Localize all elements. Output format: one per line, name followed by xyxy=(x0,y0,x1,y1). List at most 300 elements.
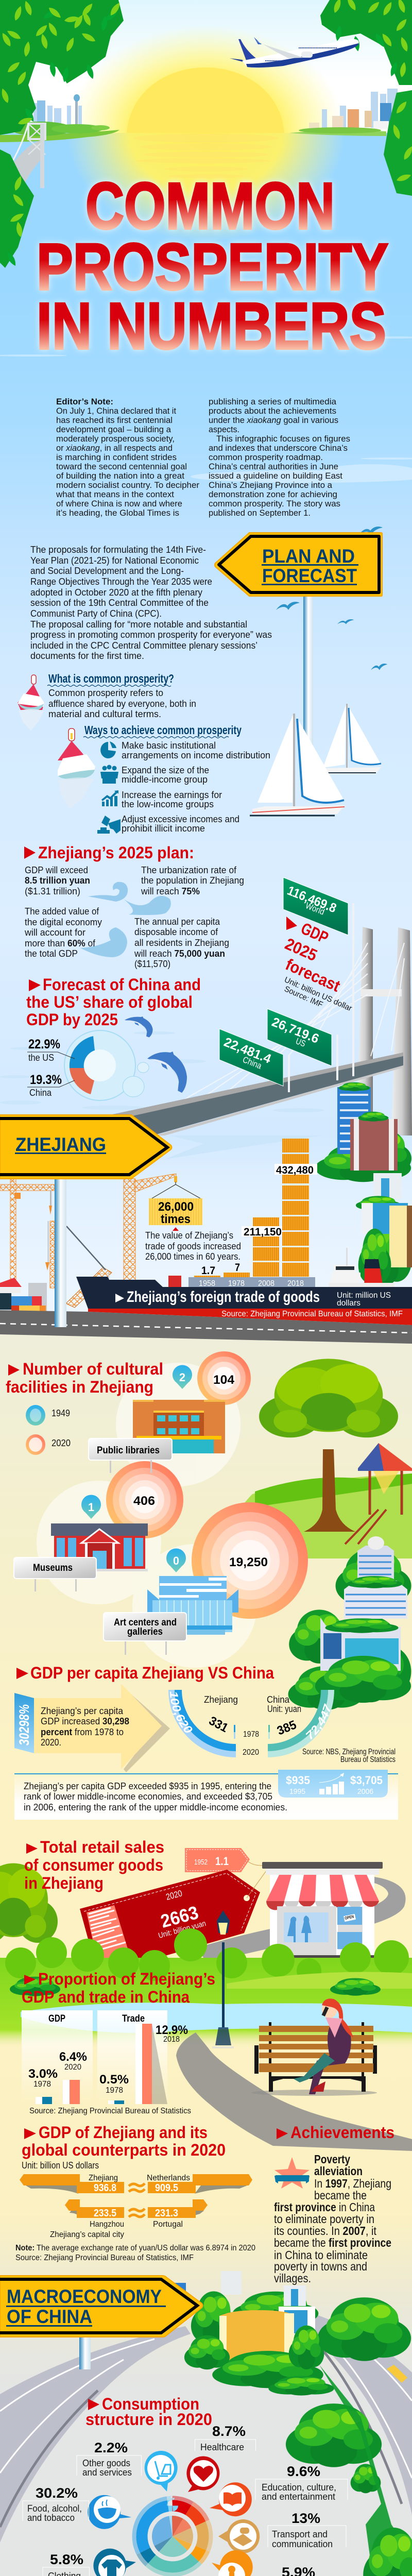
plan 2025 facts xyxy=(24,865,244,969)
consumption labels: 13% xyxy=(291,2511,320,2526)
consumption labels: and entertainment xyxy=(262,2492,335,2502)
left city island xyxy=(0,94,119,142)
editor's note: of where China is now and where xyxy=(56,499,182,509)
park: tree, hill and playground xyxy=(216,1359,412,1558)
sign: public libraries xyxy=(89,1438,172,1473)
editor's note: under the xiaokang goal in various xyxy=(209,416,338,425)
half-ring chart: Zhejiang vs China: 72,447 xyxy=(306,1703,331,1739)
half-ring chart: Zhejiang vs China: 331 xyxy=(207,1714,230,1735)
price tag 1952: 1952 xyxy=(194,1858,208,1867)
city trees and buildings xyxy=(168,2271,412,2576)
heading: GDP of Zhejiang and counterparts xyxy=(22,2123,226,2171)
achievements: became the xyxy=(314,2189,367,2202)
ways to achieve: middle-income group xyxy=(122,774,208,785)
price tag 2020 xyxy=(80,1865,270,1965)
ways to achieve xyxy=(83,723,270,834)
foreign trade of goods ship xyxy=(76,1139,412,1325)
bar panels: GDP and trade shares: 12.9% xyxy=(156,2023,188,2037)
plan paragraph: included in the CPC Central Committee plenary sessions’ xyxy=(30,640,258,651)
shop: OPEN xyxy=(345,1914,354,1921)
bubble donut chart: 19.3% xyxy=(30,1073,62,1087)
ways to achieve: Ways to achieve common prosperity xyxy=(84,723,242,737)
sign: museums: Museums xyxy=(33,1563,73,1573)
editor's note: Editor’s Note: xyxy=(56,397,113,406)
ribbons comparison: Netherlands xyxy=(147,2174,190,2182)
art centers: 1949 pin xyxy=(166,1549,186,1572)
achievements: its counties. In 2007, it xyxy=(274,2224,377,2238)
libraries: 1949 pin xyxy=(173,1365,192,1389)
heading: total retail sales: in Zhejiang xyxy=(24,1874,104,1892)
trade growth note: The value of Zhejiang’s xyxy=(145,1230,233,1241)
lawn and bushes xyxy=(0,1928,412,2048)
signpost pole: macroeconomy xyxy=(79,2337,91,2369)
museum building xyxy=(51,1523,148,1571)
bridge towers xyxy=(357,927,373,1116)
sign: China GDP: China xyxy=(242,1055,263,1071)
editor's note: aspects. xyxy=(209,425,239,434)
dolphins xyxy=(125,1016,187,1093)
income badge xyxy=(278,1770,388,1798)
museums: 1949 pin xyxy=(81,1495,101,1519)
ways to achieve: Increase the earnings for xyxy=(122,790,222,800)
callout arrow: 2020. xyxy=(41,1737,61,1748)
achievements: to eliminate poverty in xyxy=(274,2212,374,2226)
ribbons comparison: 233.5 xyxy=(94,2208,116,2219)
achievements: alleviation xyxy=(314,2164,363,2178)
bubble donut chart: China xyxy=(29,1088,52,1098)
heading: number of cultural facilities: Number of cultural xyxy=(23,1360,163,1378)
income badge: $935 xyxy=(286,1774,310,1787)
bubble donut chart xyxy=(27,1030,149,1100)
heading: Zhejiang's 2025 plan: Zhejiang’s 2025 plan: xyxy=(38,843,194,862)
trade bars xyxy=(108,2024,167,2104)
heading: number of cultural facilities xyxy=(6,1360,163,1396)
consumption labels: 9.6% xyxy=(287,2464,320,2479)
foliage: top left xyxy=(0,0,124,268)
sign: Zhejiang: ZHEJIANG xyxy=(15,1134,106,1155)
foreign trade of goods ship: Unit: million US xyxy=(337,1291,391,1300)
plan 2025 facts: all residents in Zhejiang xyxy=(134,938,229,948)
ways to achieve: the low-income groups xyxy=(122,799,214,809)
consumption labels: Other goods xyxy=(82,2458,130,2468)
foreign trade of goods ship: 2008 xyxy=(258,1279,274,1288)
China share xyxy=(70,1068,94,1094)
heading: GDP 2025 forecast: GDP xyxy=(298,919,331,947)
editor's note: China’s central authorities in June xyxy=(209,462,338,471)
editor's note: is marching in confident strides xyxy=(56,453,177,462)
foreign trade of goods ship: 7 xyxy=(235,1262,240,1274)
half-ring chart: Zhejiang vs China xyxy=(168,1690,396,1764)
plan 2025 facts: The added value of xyxy=(25,906,99,917)
sign: US GDP: US xyxy=(295,1036,307,1049)
sign: public libraries: Public libraries xyxy=(97,1445,160,1456)
editor's note: products about the achievements xyxy=(209,406,336,416)
editor's note: toward the second centennial goal xyxy=(56,462,187,471)
dockside containers and warehouse xyxy=(0,1278,47,1315)
heading: GDP of Zhejiang and counterparts: Unit: billion US dollars xyxy=(22,2160,99,2171)
heading: GDP per capita Zhejiang VS China: GDP per capita Zhejiang VS China xyxy=(30,1664,274,1682)
art centers: 19,250 circle xyxy=(192,1502,308,1619)
sign: Zhejiang xyxy=(0,1115,172,1179)
hanging container: 26,000 times: times xyxy=(161,1212,191,1226)
achievements xyxy=(274,2123,394,2285)
what is common prosperity: Common prosperity refers to xyxy=(48,688,163,698)
water ripples xyxy=(0,1031,324,1159)
bar panels: GDP and trade shares: Source: Zhejiang Provincial Bureau of Statistics xyxy=(29,2107,191,2115)
heading: GDP 2025 forecast: Source: IMF xyxy=(283,985,324,1009)
heading: GDP of Zhejiang and counterparts: global counterparts in 2020 xyxy=(22,2141,226,2159)
value labels xyxy=(274,1164,317,1175)
half-ring chart: Zhejiang vs China: 100,620 xyxy=(170,1691,193,1733)
plan paragraph: and Social Development and the Long- xyxy=(30,566,184,576)
trade growth note xyxy=(145,1227,241,1262)
callout arrow xyxy=(14,1684,170,1772)
signpost pole: plan and forecast xyxy=(303,596,313,745)
sailboat small xyxy=(323,704,381,774)
plan paragraph: Year Plan (2021-25) for National Economic xyxy=(30,555,199,566)
consumption labels: 30.2% xyxy=(36,2485,78,2501)
art center building xyxy=(147,1576,238,1635)
heading: GDP 2025 forecast: Unit: billion US dollar xyxy=(283,975,353,1013)
editor's note: common prosperity roadmap. xyxy=(209,453,323,462)
hull red stripe xyxy=(88,1309,412,1325)
consumption labels: and tobacco xyxy=(27,2513,75,2523)
heading: proportion of Zhejiang's GDP and trade xyxy=(22,1970,215,2006)
container bars xyxy=(194,1139,309,1277)
sign: art centers and galleries: galleries xyxy=(127,1626,163,1637)
plan 2025 facts: ($11,570) xyxy=(134,959,170,969)
note and source: Source: Zhejiang Provincial Bureau of Statistics, IMF xyxy=(15,2253,194,2262)
heading: total retail sales: of consumer goods xyxy=(24,1856,163,1874)
icon: food xyxy=(88,2495,131,2529)
note and source: Note: The average exchange rate of yuan/US dollar was 6.8974 in 2020 xyxy=(15,2244,255,2252)
income badge: 1995 xyxy=(289,1787,305,1796)
crane back xyxy=(0,1179,55,1288)
heading: proportion of Zhejiang's GDP and trade: GDP and trade in China xyxy=(22,1988,190,2006)
sun xyxy=(127,67,284,133)
editor's note: moderately prosperous society, xyxy=(56,434,175,444)
heading: GDP of Zhejiang and counterparts: GDP of Zhejiang and its xyxy=(39,2123,208,2142)
bar panels: GDP and trade shares: 0.5% xyxy=(99,2073,129,2087)
bridge deck xyxy=(110,1053,403,1136)
bridge cables xyxy=(170,943,404,1108)
sign: art centers and galleries: Art centers and xyxy=(114,1617,177,1628)
foreign trade of goods ship: Source: Zhejiang Provincial Bureau of Statistics, IMF xyxy=(221,1310,403,1318)
plan 2025 facts: disposable income of xyxy=(134,927,218,937)
plan 2025 facts: GDP will exceed xyxy=(25,865,88,875)
plan paragraph: adopted in October 2020 at the fifth plenary xyxy=(30,587,202,598)
callout arrow: Zhejiang’s per capita xyxy=(41,1706,124,1716)
what is common prosperity: What is common prosperity? xyxy=(48,672,174,685)
price tag 2020: 2020 xyxy=(165,1888,183,1902)
editor's note: has reached its first centennial xyxy=(56,416,173,425)
half-ring chart: Zhejiang vs China: 1978 xyxy=(243,1730,259,1739)
consumption labels: Food, alcohol, xyxy=(27,2503,82,2514)
note and source xyxy=(15,2244,255,2262)
editor's note: or xiaokang, in all respects and xyxy=(56,444,173,453)
consumption labels: communication xyxy=(272,2539,333,2549)
ways to achieve: Expand the size of the xyxy=(122,765,209,775)
editor's note: publishing a series of multimedia xyxy=(209,397,337,406)
plan 2025 facts: The annual per capita xyxy=(134,917,220,927)
plan 2025 facts: The urbanization rate of xyxy=(141,865,237,875)
plan 2025 facts: the digital economy xyxy=(25,917,102,927)
achievements: Poverty xyxy=(314,2153,350,2166)
editor's note: modern socialist country. To decipher xyxy=(56,481,200,490)
right tree top xyxy=(363,2528,412,2576)
hanging container: 26,000 times: 26,000 xyxy=(158,1200,194,1214)
sign: US GDP: 26,719.6 xyxy=(270,1015,321,1046)
heading: consumption structure: Consumption xyxy=(102,2395,199,2413)
winding road behind shop xyxy=(198,1877,406,1963)
sun glow xyxy=(67,25,345,241)
icon: pie chart xyxy=(100,741,116,758)
sign: world GDP: World xyxy=(304,901,326,917)
icon: gavel xyxy=(97,816,121,834)
achievements: first province in China xyxy=(274,2200,375,2214)
ribbons comparison: 231.3 xyxy=(155,2208,178,2219)
museums: 406 circle xyxy=(106,1460,183,1538)
buoy small xyxy=(18,675,44,731)
heading: total retail sales: Total retail sales xyxy=(40,1838,164,1856)
ribbons comparison: Hangzhou xyxy=(90,2220,124,2229)
price tag 2020: Unit: billion yuan xyxy=(158,1919,207,1940)
museums: 1949 pin: 1 xyxy=(88,1501,94,1514)
income rank panel xyxy=(14,1770,398,1820)
sailboat large xyxy=(250,714,345,816)
heading: number of cultural facilities: facilities in Zhejiang xyxy=(6,1378,153,1396)
seagulls xyxy=(276,527,387,670)
callout arrow: 30298% xyxy=(16,1704,32,1745)
street lamp xyxy=(212,1910,234,2048)
sign: macroeconomy of China xyxy=(0,2276,203,2337)
half-ring chart: Zhejiang vs China: Bureau of Statistics xyxy=(340,1755,396,1764)
sign: art centers and galleries xyxy=(104,1613,186,1655)
callout arrow: GDP increased 30,298 xyxy=(41,1716,129,1726)
bar panels: GDP and trade shares xyxy=(22,2010,191,2115)
foreign trade of goods ship: Zhejiang’s foreign trade of goods xyxy=(127,1289,320,1306)
sign: world GDP xyxy=(283,877,354,1076)
sign: world GDP: 116,469.8 xyxy=(285,884,338,916)
editor's note: what that means in the context xyxy=(56,490,174,499)
plan paragraph: Communist Party of China (CPC). xyxy=(30,608,162,619)
woman on a bench xyxy=(251,1998,377,2096)
foreign trade of goods ship: 432,480 xyxy=(276,1164,314,1176)
wispy clouds behind the editor's note xyxy=(0,336,412,483)
crane front xyxy=(124,1174,177,1287)
consumption labels: Healthcare xyxy=(200,2442,244,2452)
plan 2025 facts: more than 60% of xyxy=(25,938,96,948)
price tag 1952: 1.1 xyxy=(215,1855,229,1868)
sky xyxy=(0,0,412,133)
bubble donut chart: 22.9% xyxy=(28,1037,60,1052)
suspension bridge xyxy=(0,124,45,263)
bar panels: GDP and trade shares: GDP xyxy=(48,2013,65,2024)
legend: 1949 xyxy=(52,1408,70,1418)
achievements: became the first province xyxy=(274,2236,391,2249)
half-ring chart: Zhejiang vs China: 385 xyxy=(275,1718,298,1738)
icon: other goods xyxy=(145,2451,178,2492)
plan paragraph: Range Objectives Through the Year 2035 were xyxy=(30,577,212,587)
editor's note: common prosperity. The story was xyxy=(209,499,340,509)
hanging container: 26,000 times xyxy=(149,1177,202,1226)
trees and buildings at right of port xyxy=(315,1082,412,1285)
bar panels: GDP and trade shares: 1978 xyxy=(33,2080,51,2089)
path through park xyxy=(176,2032,412,2151)
income rank panel: rank of lower middle-income economies, and exceeded $3,705 xyxy=(24,1791,272,1802)
sun reflection xyxy=(134,133,278,178)
heading: total retail sales xyxy=(24,1838,164,1892)
category icons xyxy=(88,2451,260,2576)
main title xyxy=(37,170,388,363)
consumption labels: 2.2% xyxy=(94,2440,128,2455)
donut chart: consumption structure xyxy=(134,2498,211,2575)
icon: healthcare xyxy=(186,2456,219,2492)
half-ring chart: Zhejiang vs China: 2020 xyxy=(243,1748,259,1757)
hull xyxy=(76,1277,412,1309)
highways xyxy=(0,2314,412,2543)
trees and tower with satellite dish xyxy=(288,1536,411,1710)
editor's note xyxy=(56,397,350,518)
income rank panel: in 2006, entering the rank of the upper middle-income economies. xyxy=(24,1802,287,1812)
cable-stayed bridge xyxy=(110,927,412,1136)
heading: GDP 2025 forecast: forecast xyxy=(283,955,343,995)
sign: museums xyxy=(14,1557,96,1591)
bar panels: GDP and trade shares: 2018 xyxy=(163,2035,180,2044)
left tree xyxy=(0,1863,58,1943)
sign: China GDP: 22,481.4 xyxy=(222,1035,273,1066)
ribbons comparison xyxy=(20,2174,252,2239)
road xyxy=(0,1310,412,1344)
hero illustration: sunrise over the bay xyxy=(0,0,412,363)
plan paragraph xyxy=(30,545,272,661)
plan 2025 facts: 8.5 trillion yuan xyxy=(25,875,90,886)
ways to achieve: Adjust excessive incomes and xyxy=(122,814,239,824)
plan 2025 facts: will account for xyxy=(24,927,85,938)
plan paragraph: session of the 19th Central Committee of the xyxy=(30,598,209,608)
heading: GDP 2025 forecast: 2025 xyxy=(282,935,320,964)
chart title xyxy=(115,1294,124,1302)
icon: transport and communication xyxy=(218,2519,260,2553)
sign: macroeconomy of China: OF CHINA xyxy=(7,2306,92,2327)
bar panels: GDP and trade shares: 6.4% xyxy=(59,2050,87,2064)
ways to achieve: arrangements on income distribution xyxy=(122,750,270,760)
shop xyxy=(262,1862,383,1962)
pond xyxy=(21,2003,412,2033)
income badge: 2006 xyxy=(357,1787,373,1796)
US share xyxy=(70,1036,95,1068)
main title: COMMON xyxy=(85,170,335,243)
consumption labels: 8.7% xyxy=(212,2424,246,2439)
consumption labels: 5.8% xyxy=(50,2552,83,2567)
right city island xyxy=(289,89,405,136)
art centers: 1949 pin: 0 xyxy=(173,1554,179,1567)
legend xyxy=(26,1405,71,1455)
editor's note: it’s heading, the Global Times is xyxy=(56,509,179,518)
achievements: Achievements xyxy=(290,2123,394,2142)
foreign trade of goods ship: 211,150 xyxy=(244,1226,282,1238)
ribbons comparison: Zhejiang xyxy=(89,2174,118,2182)
sign: plan and forecast: PLAN AND xyxy=(262,546,355,567)
library building xyxy=(133,1400,225,1453)
libraries: 1949 pin: 2 xyxy=(179,1371,185,1384)
heading: forecast of China and the US share: the US’ share of global xyxy=(26,993,193,1011)
libraries: 104 circle xyxy=(197,1351,251,1405)
plan paragraph: documents for the first time. xyxy=(30,651,144,661)
foreign trade of goods ship: 2018 xyxy=(287,1279,304,1288)
consumption labels: Education, culture, xyxy=(262,2482,336,2493)
income rank panel: Zhejiang’s per capita GDP exceeded $935 in 1995, entering the xyxy=(24,1781,271,1791)
trade growth note: 26,000 times in 60 years. xyxy=(145,1251,241,1262)
trade growth note: trade of goods increased xyxy=(145,1241,241,1251)
heading: consumption structure xyxy=(85,2395,212,2429)
editor's note: On July 1, China declared that it xyxy=(56,406,176,416)
plan paragraph: The proposal calling for “more notable and substantial xyxy=(30,619,247,630)
stacked bar base xyxy=(188,1277,315,1287)
ribbons comparison: Zhejiang’s capital city xyxy=(50,2230,124,2239)
bar panels: GDP and trade shares: 2020 xyxy=(64,2063,81,2072)
price tag 2020: 2663 xyxy=(158,1902,201,1932)
plan 2025 facts: will reach 75% xyxy=(141,886,200,896)
foliage: top right xyxy=(320,0,412,196)
sign: plan and forecast: FORECAST xyxy=(262,565,357,586)
consumption labels: Transport and xyxy=(272,2529,328,2539)
income badge: $3,705 xyxy=(350,1774,383,1787)
plan paragraph: The proposals for formulating the 14th Five- xyxy=(30,545,206,555)
sign: macroeconomy of China: MACROECONOMY xyxy=(7,2286,162,2307)
achievements: in China to eliminate xyxy=(274,2248,368,2262)
consumption labels: and services xyxy=(82,2467,132,2478)
heading: proportion of Zhejiang's GDP and trade: Proportion of Zhejiang’s xyxy=(38,1970,215,1988)
foreign trade of goods ship: 1978 xyxy=(228,1279,245,1288)
foreign trade of goods ship: dollars xyxy=(337,1299,360,1308)
plan 2025 facts: will reach 75,000 yuan xyxy=(134,948,225,959)
crane boom on ship xyxy=(66,1226,113,1308)
half-ring chart: Zhejiang vs China: Unit: yuan xyxy=(267,1704,301,1714)
price tag 1952 xyxy=(185,1848,276,1872)
icon: rising chart xyxy=(101,790,118,806)
year labels: 1958 xyxy=(199,1279,215,1288)
wave decorations xyxy=(80,882,171,957)
achievements: In 1997, Zhejiang xyxy=(314,2177,391,2190)
heading: forecast of China and the US share xyxy=(26,975,201,1029)
plan 2025 facts: the total GDP xyxy=(25,948,78,959)
plan paragraph: progress in promoting common prosperity for everyone” was xyxy=(30,630,272,640)
achievements: villages. xyxy=(274,2272,311,2285)
heading: consumption structure: structure in 2020 xyxy=(85,2410,212,2429)
ways to achieve: prohibit illicit income xyxy=(122,823,205,834)
icon: people xyxy=(100,765,118,784)
signpost pole: Zhejiang xyxy=(55,1179,66,1327)
bar panels: GDP and trade shares: 1978 xyxy=(106,2086,123,2095)
what is common prosperity: affluence shared by everyone, both in xyxy=(48,699,196,709)
buoy large xyxy=(58,728,95,809)
glow discs behind cultural facilities xyxy=(37,1363,257,1668)
editor's note: and indexes that underscore China’s xyxy=(209,444,348,453)
heading: GDP 2025 forecast xyxy=(282,917,353,1013)
heading: forecast of China and the US share: Forecast of China and xyxy=(43,975,201,994)
ribbons comparison: 909.5 xyxy=(155,2182,178,2194)
icon: daily necessities xyxy=(212,2550,253,2576)
callout arrow: percent from 1978 to xyxy=(41,1727,124,1737)
what is common prosperity: material and cultural terms. xyxy=(48,709,161,719)
editor's note: China’s Zhejiang Province into a xyxy=(209,481,333,490)
museums: 406 circle: 406 xyxy=(133,1494,155,1508)
sign: US GDP xyxy=(267,1009,338,1080)
red cargo xyxy=(168,1276,181,1287)
art centers: 19,250 circle: 19,250 xyxy=(229,1555,268,1569)
icon: star with ribbon xyxy=(274,2157,310,2189)
